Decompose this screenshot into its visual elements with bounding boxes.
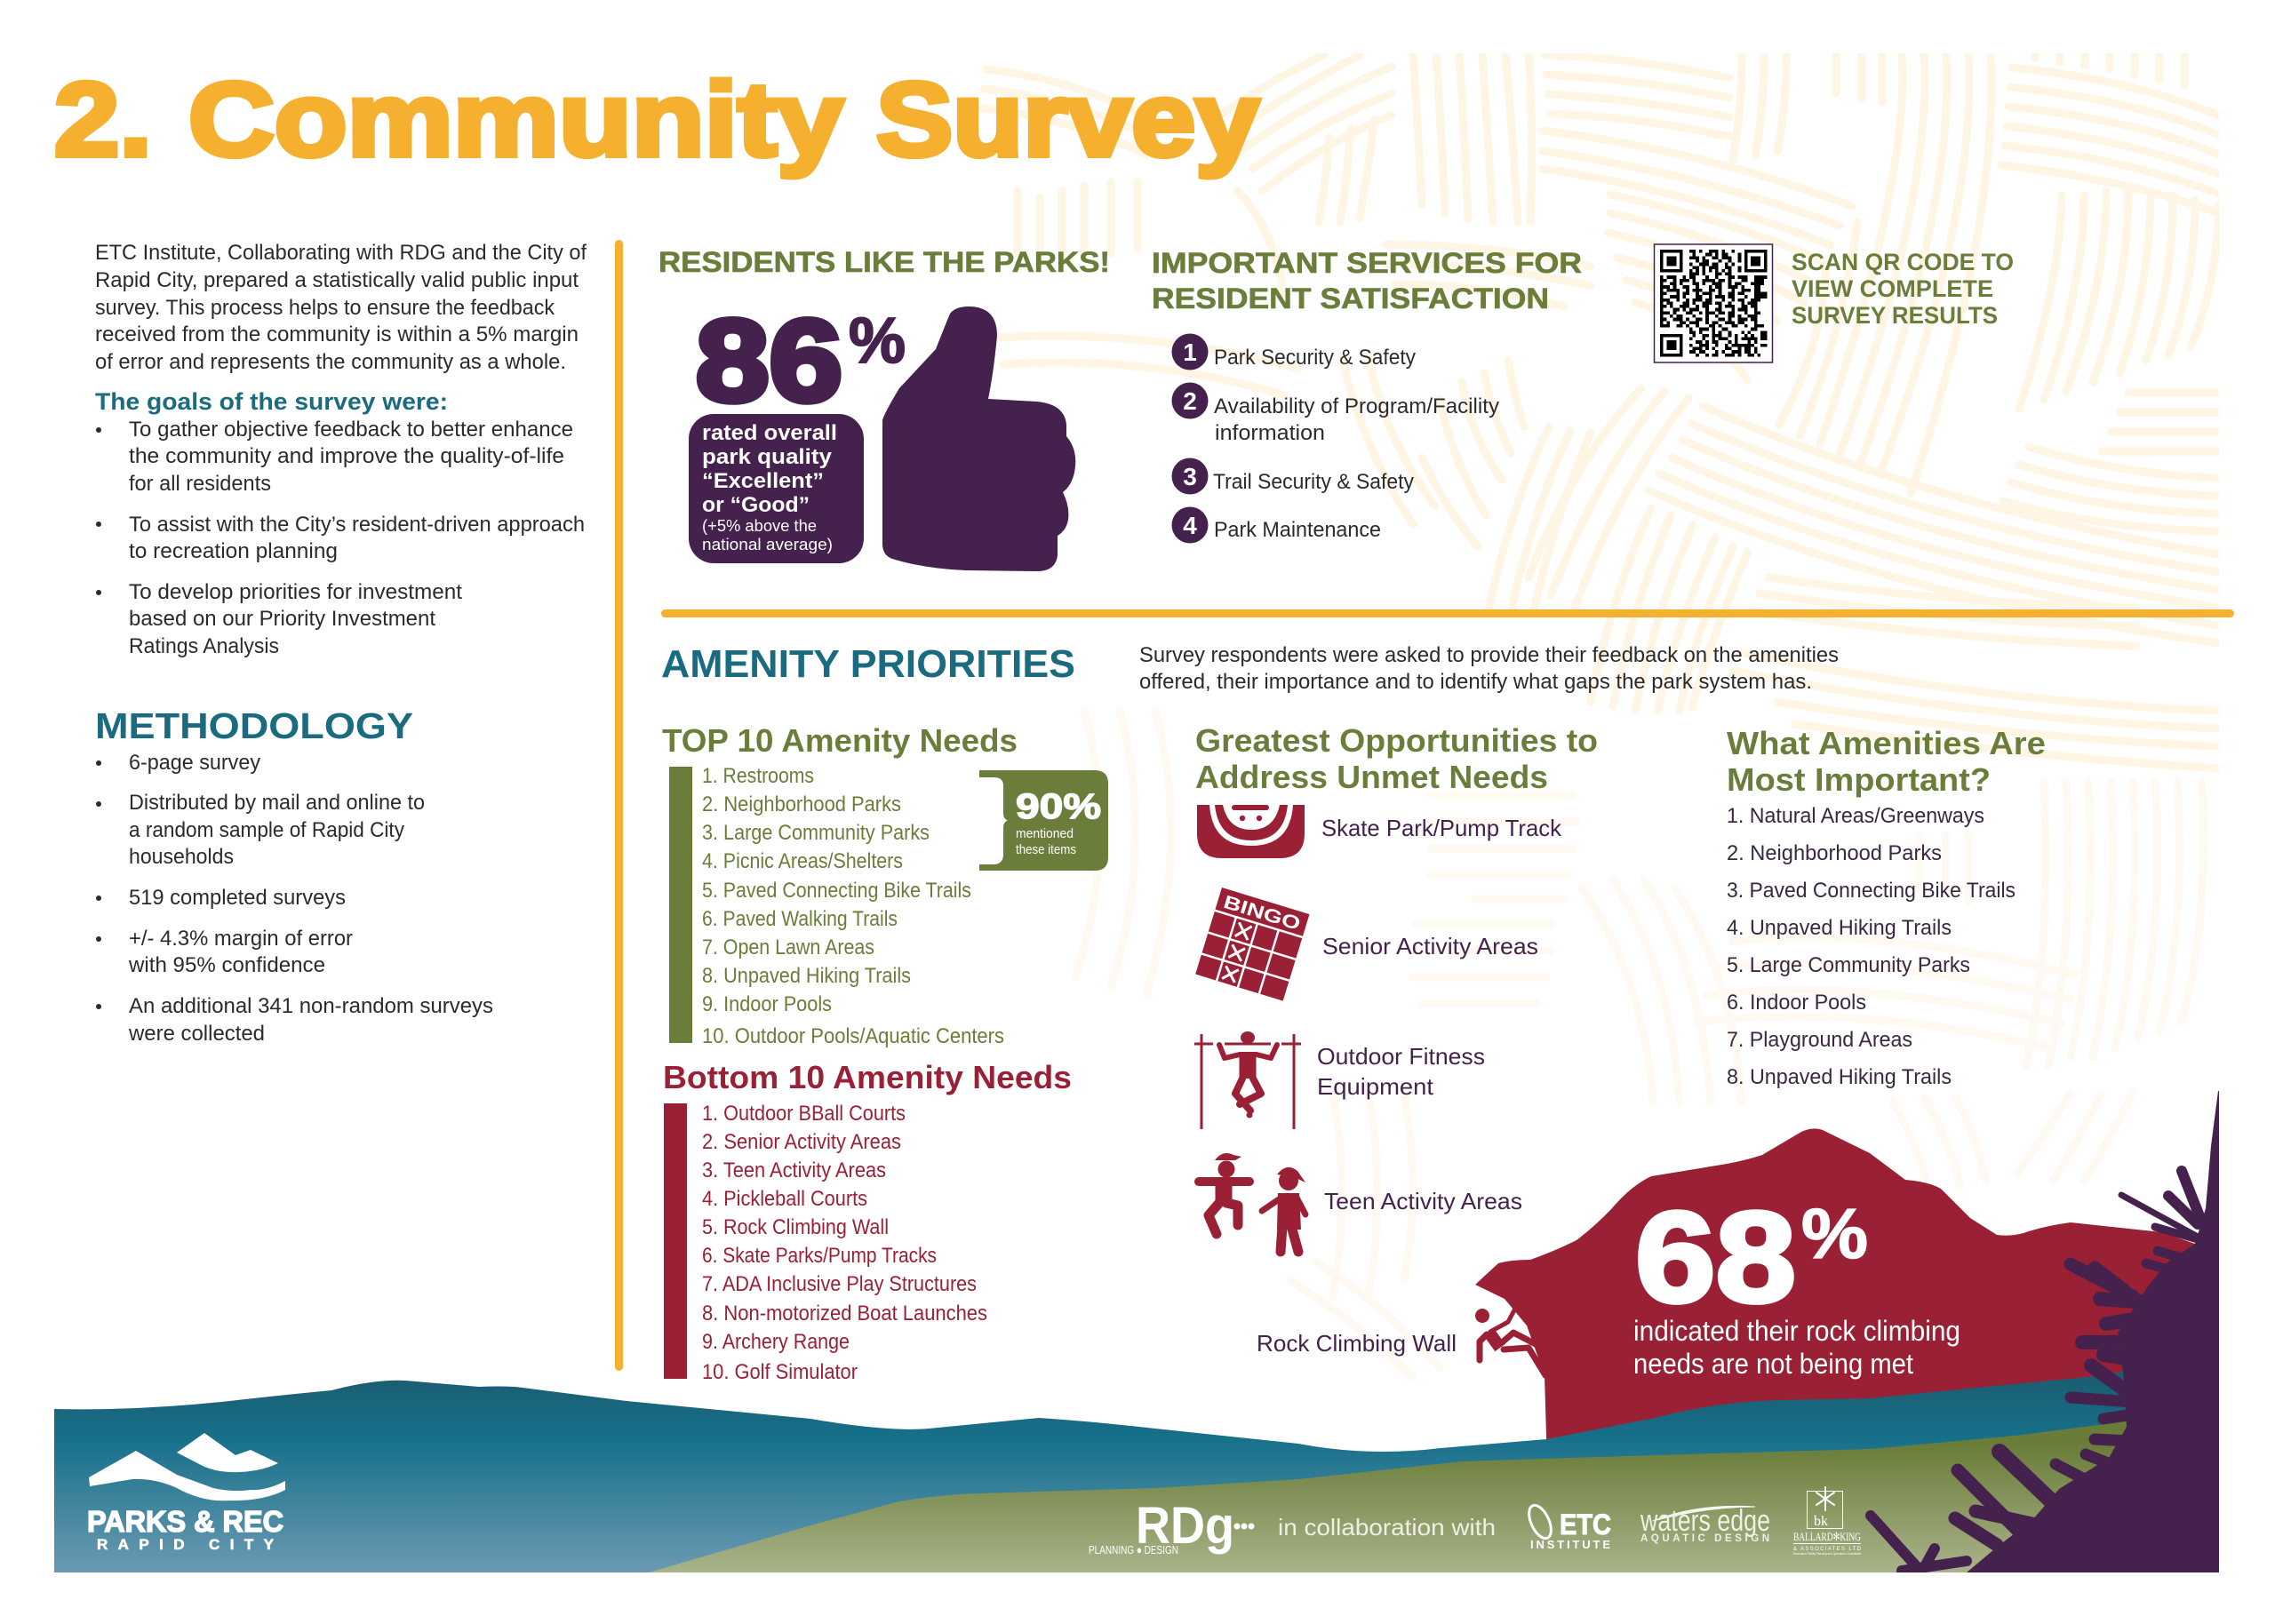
68 percent figure: 68 xyxy=(1635,1185,1796,1329)
vertical orange rule xyxy=(615,240,623,1371)
rated callout box: “Excellent” xyxy=(702,469,824,493)
rated callout box xyxy=(689,414,864,563)
68 percent figure xyxy=(1638,1208,1867,1305)
panel: introduction text xyxy=(95,241,587,374)
bottom 10 list: 1. Outdoor BBall Courts xyxy=(702,1102,906,1126)
logo: Parks & Rec Rapid City: RAPID CITY xyxy=(97,1536,275,1553)
top 10 list: 4. Picnic Areas/Shelters xyxy=(702,849,903,873)
bottom 10 list: 7. ADA Inclusive Play Structures xyxy=(702,1272,977,1296)
86 percent figure: 86 xyxy=(696,295,842,426)
label: Equipment xyxy=(1317,1073,1434,1100)
logo: ETC Institute: INSTITUTE xyxy=(1530,1538,1610,1551)
logo: Ballard King: bk xyxy=(1814,1514,1828,1529)
services list: Trail Security & Safety xyxy=(1213,470,1415,494)
heading: Address Unmet Needs xyxy=(1195,759,1548,795)
ranked list: 2. Neighborhood Parks xyxy=(1727,841,1942,865)
amenity intro text: offered, their importance and to identify what gaps the park system has. xyxy=(1139,670,1812,694)
heading: amenity priorities: AMENITY PRIORITIES xyxy=(661,642,1075,686)
list: survey goals: the community and improve the quality-of-life xyxy=(129,444,564,468)
list: survey goals xyxy=(96,418,585,658)
background weave pattern xyxy=(983,53,2219,1377)
icon: thumbs up xyxy=(882,306,1075,571)
ranked list xyxy=(1727,804,2016,1089)
teal hills xyxy=(54,1372,2127,1572)
logo: Ballard King: BALLARD✻KING xyxy=(1793,1530,1861,1543)
bottom 10 list: 8. Non-motorized Boat Launches xyxy=(702,1302,987,1325)
86 percent figure xyxy=(696,295,906,426)
90 percent callout xyxy=(979,770,1108,871)
green bar xyxy=(669,767,692,1043)
icon: teens xyxy=(1199,1153,1305,1252)
top 10 list: 6. Paved Walking Trails xyxy=(702,907,898,931)
logo: RDG: RDg xyxy=(1136,1497,1234,1555)
logo: Parks & Rec Rapid City: PARKS & REC xyxy=(87,1505,283,1538)
heading xyxy=(1195,722,1598,795)
heading: Greatest Opportunities to xyxy=(1195,722,1598,759)
logo: ETC Institute xyxy=(1524,1502,1611,1551)
rated callout box: or “Good” xyxy=(702,493,810,517)
list: methodology: 519 completed surveys xyxy=(129,886,346,910)
label: Rock Climbing Wall xyxy=(1257,1330,1457,1357)
numbered badges: 2 xyxy=(1183,387,1197,415)
list: methodology: 6-page survey xyxy=(129,751,261,775)
amenity intro text xyxy=(1139,643,1839,694)
QR code xyxy=(1655,244,1772,362)
list: methodology: +/- 4.3% margin of error xyxy=(129,927,353,951)
list: methodology: a random sample of Rapid City xyxy=(129,818,405,842)
ranked list: 1. Natural Areas/Greenways xyxy=(1727,804,1984,828)
heading: goals: The goals of the survey were: xyxy=(95,388,448,415)
90 percent callout: mentioned xyxy=(1016,826,1074,841)
top 10 list: 9. Indoor Pools xyxy=(702,992,832,1016)
bottom 10 list: 6. Skate Parks/Pump Tracks xyxy=(702,1244,937,1268)
list: methodology: Distributed by mail and online to xyxy=(129,791,425,815)
panel: introduction text: of error and represents the community as a whole. xyxy=(95,350,566,374)
numbered badges: 4 xyxy=(1183,512,1197,539)
rock climbing caption: needs are not being met xyxy=(1633,1348,1913,1380)
panel: introduction text: survey. This process helps to ensure the feedback xyxy=(95,296,555,320)
icon: climber xyxy=(1475,1305,1545,1375)
rated callout box: (+5% above the xyxy=(702,517,817,535)
evergreen tree silhouette xyxy=(1871,1091,2221,1572)
list: survey goals: To develop priorities for investment xyxy=(129,580,462,604)
bottom 10 list: 3. Teen Activity Areas xyxy=(702,1158,886,1182)
green hill xyxy=(649,1421,2127,1572)
label: Senior Activity Areas xyxy=(1322,933,1538,959)
heading: Bottom 10 Amenity Needs xyxy=(663,1059,1072,1095)
bottom 10 list: 4. Pickleball Courts xyxy=(702,1187,867,1211)
68 percent figure: % xyxy=(1801,1194,1868,1273)
top 10 list: 2. Neighborhood Parks xyxy=(702,792,901,816)
top 10 list: 5. Paved Connecting Bike Trails xyxy=(702,879,971,903)
logo: RDG: PLANNING ● DESIGN xyxy=(1089,1543,1178,1556)
rated callout box: park quality xyxy=(702,445,833,469)
title xyxy=(54,61,1259,179)
rock climbing caption xyxy=(1633,1315,1960,1380)
list: methodology: households xyxy=(129,845,234,869)
heading: RESIDENT SATISFACTION xyxy=(1152,283,1549,314)
title: 2. xyxy=(54,61,152,179)
rated callout box: national average) xyxy=(702,536,833,553)
list: survey goals: To assist with the City’s resident-driven approach xyxy=(129,513,585,537)
rated callout box: rated overall xyxy=(702,421,837,445)
panel: introduction text: Rapid City, prepared a statistically valid public input xyxy=(95,268,579,292)
top 10 list xyxy=(702,764,1004,1048)
90 percent callout: these items xyxy=(1016,842,1076,857)
rock climbing caption: indicated their rock climbing xyxy=(1633,1315,1960,1347)
logo: ETC Institute: ETC xyxy=(1560,1509,1611,1540)
list: survey goals: Ratings Analysis xyxy=(129,634,279,658)
heading: Most Important? xyxy=(1727,761,1991,798)
ranked list: 4. Unpaved Hiking Trails xyxy=(1727,916,1952,940)
services list: information xyxy=(1215,421,1325,445)
heading xyxy=(1727,725,2046,798)
panel: top 10 amenity needs xyxy=(662,722,1108,1048)
panel: residents like the parks xyxy=(659,246,1110,571)
top 10 list: 8. Unpaved Hiking Trails xyxy=(702,964,911,988)
top 10 list: 3. Large Community Parks xyxy=(702,821,930,845)
bottom 10 list: 10. Golf Simulator xyxy=(702,1360,858,1384)
top 10 list: 10. Outdoor Pools/Aquatic Centers xyxy=(702,1024,1004,1048)
services list: Park Security & Safety xyxy=(1214,346,1417,370)
title: Survey xyxy=(876,61,1259,179)
top 10 list: 1. Restrooms xyxy=(702,764,814,788)
scan QR code caption: SURVEY RESULTS xyxy=(1792,302,1998,329)
icon: skate park xyxy=(1197,805,1305,858)
title: Community xyxy=(188,61,843,179)
scan QR code caption: SCAN QR CODE TO xyxy=(1792,249,2014,275)
logo: Ballard King: Recreation Facility Planning and Operations Consultants xyxy=(1793,1551,1861,1556)
label: Teen Activity Areas xyxy=(1324,1188,1522,1214)
logo: Parks & Rec Rapid City xyxy=(87,1433,285,1553)
bottom 10 list: 9. Archery Range xyxy=(702,1330,850,1354)
panel: introduction text: ETC Institute, Collaborating with RDG and the City of xyxy=(95,241,587,265)
bottom 10 list: 2. Senior Activity Areas xyxy=(702,1130,901,1154)
red bar xyxy=(664,1103,687,1379)
scan QR code caption xyxy=(1792,249,2014,329)
panel: introduction text: received from the community is within a 5% margin xyxy=(95,322,579,346)
heading: methodology: METHODOLOGY xyxy=(95,705,413,746)
heading xyxy=(1152,247,1582,314)
icon: bingo card: BINGO xyxy=(1221,892,1303,935)
icon: bingo card xyxy=(1195,888,1309,1001)
ranked list: 5. Large Community Parks xyxy=(1727,953,1970,977)
icon: outdoor fitness xyxy=(1194,1031,1301,1129)
90 percent callout: 90% xyxy=(1016,787,1101,826)
list: methodology: An additional 341 non-random surveys xyxy=(129,994,493,1018)
list: survey goals: to recreation planning xyxy=(129,539,338,563)
amenity intro text: Survey respondents were asked to provide their feedback on the amenities xyxy=(1139,643,1839,667)
services list xyxy=(1213,346,1500,542)
numbered badges: 3 xyxy=(1183,463,1197,490)
ranked list: 3. Paved Connecting Bike Trails xyxy=(1727,879,2016,903)
list: survey goals: To gather objective feedback to better enhance xyxy=(129,418,573,442)
label xyxy=(1317,1043,1485,1100)
collaboration text: in collaboration with xyxy=(1278,1514,1496,1540)
list: methodology: with 95% confidence xyxy=(128,953,325,977)
top 10 list: 7. Open Lawn Areas xyxy=(702,935,874,959)
ranked list: 6. Indoor Pools xyxy=(1727,991,1866,1015)
scan QR code caption: VIEW COMPLETE xyxy=(1792,275,1993,302)
heading: What Amenities Are xyxy=(1727,725,2046,761)
panel: important services xyxy=(1152,247,1582,544)
ranked list: 7. Playground Areas xyxy=(1727,1028,1912,1052)
list: methodology: were collected xyxy=(128,1022,265,1046)
label: Skate Park/Pump Track xyxy=(1321,815,1562,841)
bottom 10 list: 5. Rock Climbing Wall xyxy=(702,1215,889,1239)
horizontal orange rule xyxy=(661,609,2234,617)
logo: Waters Edge xyxy=(1640,1504,1770,1544)
logo: Ballard King xyxy=(1793,1487,1862,1556)
heading: RESIDENTS LIKE THE PARKS! xyxy=(659,246,1110,278)
red mountain with 68% callout xyxy=(1475,1128,2195,1466)
panel: bottom 10 amenity needs xyxy=(663,1059,1072,1384)
label: Outdoor Fitness xyxy=(1317,1043,1485,1070)
footer landscape xyxy=(54,1091,2221,1572)
logo: Ballard King: & ASSOCIATES LTD xyxy=(1793,1547,1862,1552)
logo: RDG xyxy=(1089,1497,1255,1556)
logo: Waters Edge: waters edge xyxy=(1640,1504,1770,1538)
heading: IMPORTANT SERVICES FOR xyxy=(1152,247,1582,279)
bottom 10 list xyxy=(702,1102,987,1384)
panel: greatest opportunities xyxy=(1194,722,1598,1375)
logo: Waters Edge: AQUATIC DESIGN xyxy=(1640,1533,1769,1544)
list: methodology xyxy=(96,751,493,1046)
86 percent figure: % xyxy=(849,306,906,377)
list: survey goals: for all residents xyxy=(129,472,271,496)
panel: what amenities are most important xyxy=(1727,725,2046,1089)
ranked list: 8. Unpaved Hiking Trails xyxy=(1727,1065,1952,1089)
services list: Availability of Program/Facility xyxy=(1214,394,1500,418)
list: survey goals: based on our Priority Investment xyxy=(129,607,435,631)
numbered badges xyxy=(1171,334,1209,544)
services list: Park Maintenance xyxy=(1214,518,1381,542)
numbered badges: 1 xyxy=(1183,338,1197,366)
heading: TOP 10 Amenity Needs xyxy=(662,722,1018,759)
